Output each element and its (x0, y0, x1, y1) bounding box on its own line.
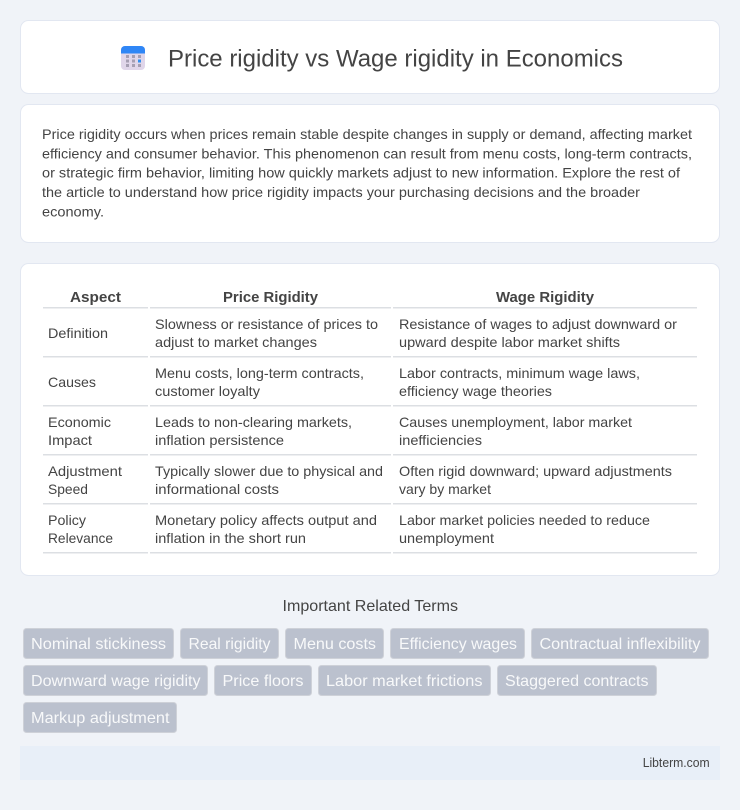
chip: staggered contracts (498, 666, 656, 696)
chip: staggered contracts: Staggered contracts (505, 673, 648, 690)
row: policy relevance: Policy (48, 512, 86, 528)
row: adjustment speed (48, 463, 672, 497)
row: economic impact: Impact (48, 432, 92, 448)
chip: contractual inflexibility: Contractual inflexibility (540, 636, 700, 653)
row: economic impact: inefficiencies (399, 432, 482, 448)
chip: price floors (214, 666, 312, 696)
row: adjustment speed: vary by market (399, 481, 491, 497)
chip: price floors: Price floors (222, 673, 304, 690)
row: definition (48, 316, 677, 350)
table header: Price Rigidity (223, 289, 319, 306)
footer bar (20, 746, 720, 780)
row: economic impact: Leads to non-clearing markets, (155, 414, 352, 430)
row: definition: Definition (48, 325, 108, 341)
row: definition: Resistance of wages to adjust downward or (399, 316, 677, 332)
row: policy relevance (48, 512, 650, 546)
row: causes: efficiency wage theories (399, 383, 552, 399)
row: economic impact (48, 414, 632, 448)
heading: important related terms: Important Related Terms (282, 598, 458, 615)
panel: term chips (24, 628, 708, 732)
chip: menu costs: Menu costs (294, 636, 376, 653)
chip: labor market frictions (318, 666, 490, 696)
table header: Wage Rigidity (496, 289, 595, 306)
row: causes: customer loyalty (155, 383, 260, 399)
row: policy relevance: Labor market policies needed to reduce (399, 512, 650, 528)
row: adjustment speed: Speed (48, 481, 88, 497)
footer source text: Libterm.com (643, 756, 710, 770)
row: adjustment speed: informational costs (155, 481, 279, 497)
title: Price rigidity vs Wage rigidity in Economics (168, 46, 623, 72)
row: economic impact: inflation persistence (155, 432, 284, 448)
row: economic impact: Causes unemployment, labor market (399, 414, 632, 430)
table header: Aspect (70, 289, 121, 306)
row: policy relevance: Relevance (48, 530, 113, 546)
panel: comparison table (20, 264, 720, 576)
intro paragraph: economy. (42, 203, 104, 219)
chip: nominal stickiness (24, 628, 174, 658)
chip: markup adjustment: Markup adjustment (31, 710, 170, 727)
row: causes: Menu costs, long-term contracts, (155, 365, 364, 381)
row: causes: Labor contracts, minimum wage laws, (399, 365, 640, 381)
intro paragraph: Price rigidity occurs when prices remain stable despite changes in supply or demand, affecting market (42, 126, 692, 142)
row: policy relevance: unemployment (399, 530, 494, 546)
row: causes (48, 365, 640, 399)
chip: real rigidity (180, 628, 278, 658)
table header (70, 289, 595, 306)
intro paragraph: efficiency and consumer behavior. This phenomenon can result from menu costs, long-term contracts, (42, 145, 692, 161)
chip: downward wage rigidity: Downward wage rigidity (31, 673, 200, 690)
row: definition: adjust to market changes (155, 334, 317, 350)
intro paragraph (42, 126, 692, 219)
row: adjustment speed: Often rigid downward; upward adjustments (399, 463, 672, 479)
icon: calendar (121, 46, 145, 70)
chip: downward wage rigidity (24, 666, 208, 696)
chip: contractual inflexibility (532, 628, 708, 658)
chip: menu costs (286, 628, 384, 658)
row: adjustment speed: Adjustment (48, 463, 122, 479)
panel: title header (20, 20, 720, 94)
chip: efficiency wages: Efficiency wages (399, 636, 517, 653)
row: policy relevance: inflation in the short run (155, 530, 306, 546)
row: definition: Slowness or resistance of prices to (155, 316, 378, 332)
row: policy relevance: Monetary policy affects output and (155, 512, 377, 528)
chip: nominal stickiness: Nominal stickiness (31, 636, 166, 653)
chip: markup adjustment (24, 702, 176, 732)
row: causes: Causes (48, 374, 96, 390)
intro paragraph: the article to understand how price rigidity impacts your purchasing decisions and the broader (42, 184, 640, 200)
row: definition: upward despite labor market shifts (399, 334, 620, 350)
chip: efficiency wages (390, 628, 524, 658)
chip: real rigidity: Real rigidity (188, 636, 270, 653)
row: adjustment speed: Typically slower due to physical and (155, 463, 383, 479)
panel: introduction (20, 104, 720, 242)
intro paragraph: or strategic firm behavior, limiting how quickly markets adjust to new information. Explore the rest of (42, 165, 680, 181)
chip: labor market frictions: Labor market frictions (326, 673, 482, 690)
row: economic impact: Economic (48, 414, 111, 430)
